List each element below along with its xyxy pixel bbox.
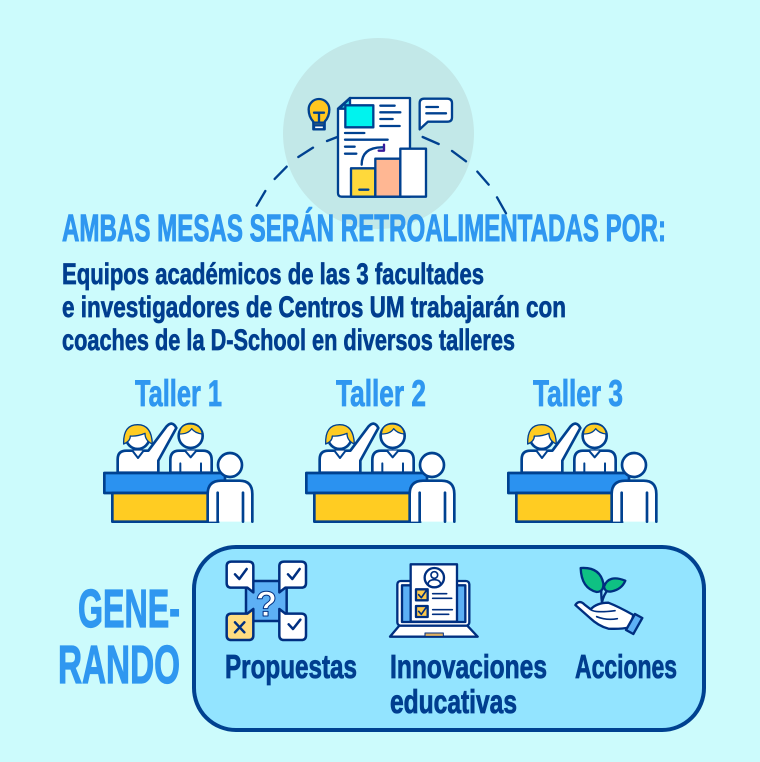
panel: results [194, 547, 704, 730]
icon: speech bubble [420, 99, 452, 129]
heading: generando [58, 579, 180, 695]
icon: hand with sprout [575, 568, 642, 634]
icon: workshop group 1 [104, 424, 252, 522]
heading: Taller 1: Taller 1 [135, 373, 222, 414]
label: Acciones: Acciones [575, 648, 677, 685]
text block: description [62, 258, 566, 357]
text block: description: Equipos académicos de las 3 facultades [62, 258, 484, 291]
label: Innovaciones educativas [390, 648, 547, 720]
label: Innovaciones educativas: Innovaciones [390, 648, 547, 685]
background circle [283, 38, 474, 229]
heading: Taller 2: Taller 2 [336, 373, 426, 414]
label: Propuestas: Propuestas [225, 648, 357, 685]
icon: laptop with checklist [390, 564, 478, 637]
heading: generando: RANDO [58, 635, 180, 695]
text block: description: coaches de la D-School en diversos talleres [62, 324, 515, 357]
icon: workshop group 3 [508, 424, 656, 522]
icon: workshop group 2 [306, 424, 454, 522]
dashed arc [257, 137, 506, 213]
icon: document with bar chart [338, 98, 426, 197]
text block: description: e investigadores de Centros UM trabajarán con [62, 291, 566, 324]
icon: light bulb [309, 99, 329, 129]
heading: Taller 3: Taller 3 [533, 373, 623, 414]
label: Innovaciones educativas: educativas [390, 683, 517, 720]
heading: generando: GENE- [78, 579, 180, 639]
icon: proposals [227, 562, 306, 640]
icon: proposals: ? [256, 585, 277, 624]
